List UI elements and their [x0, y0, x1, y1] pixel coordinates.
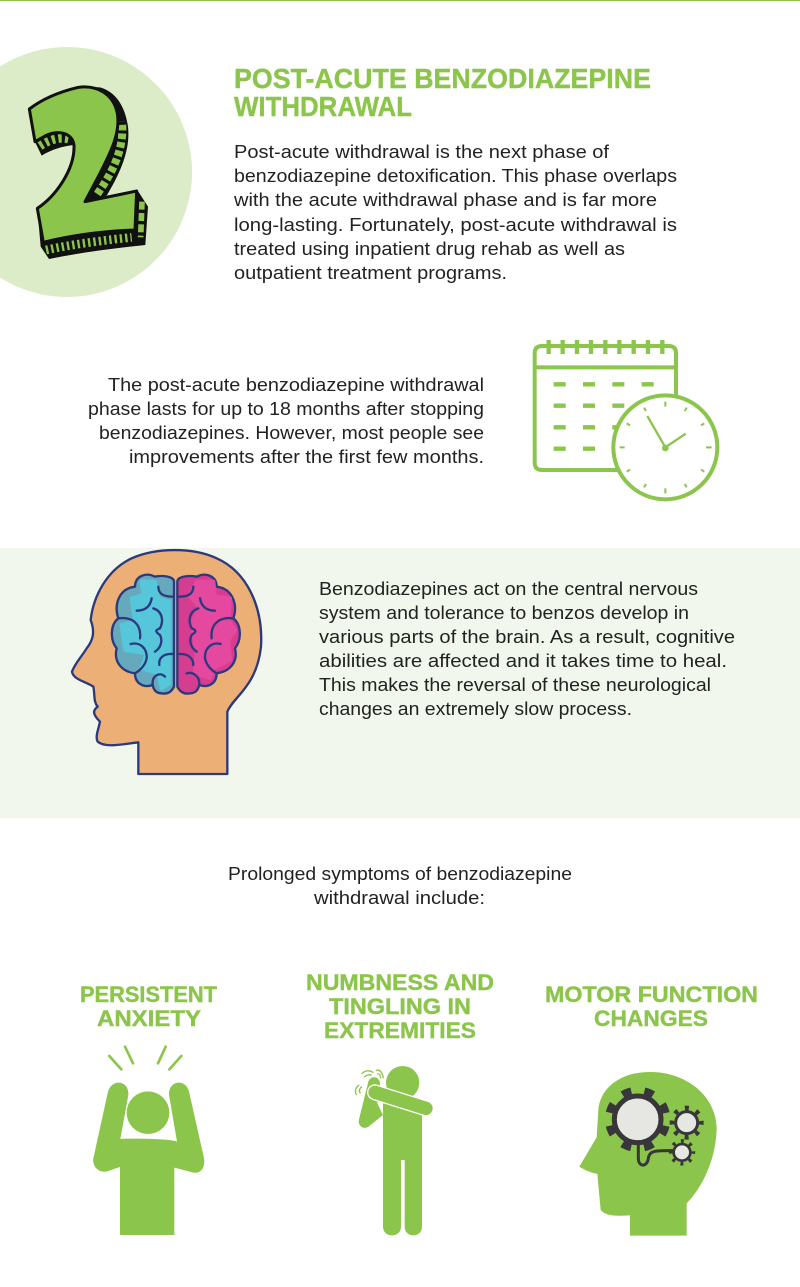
small gear [671, 1141, 693, 1164]
text block: intro: benzodiazepine detoxification. This phase overlaps [234, 166, 677, 186]
text block: brain explanation: Benzodiazepines act on the central nervous [319, 579, 698, 599]
panel: brain section [0, 548, 800, 818]
heading: motor function changes: MOTOR FUNCTION [545, 982, 758, 1007]
text block: symptoms intro: Prolonged symptoms of benzodiazepine [228, 864, 572, 884]
text block: intro [233, 142, 677, 283]
large gear [609, 1091, 666, 1148]
icon: calendar with clock [535, 340, 717, 499]
heading: numbness and tingling: EXTREMITIES [324, 1018, 476, 1043]
text block: brain explanation: various parts of the brain. As a result, cognitive [319, 627, 735, 647]
text block: duration: The post-acute benzodiazepine withdrawal [108, 375, 484, 395]
icon: head with brain [72, 550, 261, 774]
icon: anxious person [93, 1047, 204, 1235]
text block: brain explanation: changes an extremely slow process. [319, 699, 632, 719]
text block: brain explanation [319, 579, 735, 719]
icon: head with gears [579, 1072, 717, 1236]
heading: WITHDRAWAL [234, 91, 412, 122]
text block: intro: with the acute withdrawal phase and is far more [233, 190, 657, 210]
panel: number badge [0, 47, 192, 297]
heading: persistent anxiety: ANXIETY [97, 1006, 201, 1031]
heading: persistent anxiety [80, 982, 218, 1031]
text block: brain explanation: abilities are affected and it takes time to heal. [319, 651, 727, 671]
text block: brain explanation: system and tolerance to benzos develop in [319, 603, 689, 623]
text block: duration [88, 375, 484, 467]
heading: POST-ACUTE BENZODIAZEPINE [234, 63, 651, 94]
icon: person with tingling arm [355, 1066, 426, 1235]
heading: numbness and tingling [306, 970, 494, 1043]
heading: persistent anxiety: PERSISTENT [80, 982, 218, 1007]
text block: duration: improvements after the first few months. [129, 447, 484, 467]
text block: symptoms intro: withdrawal include: [313, 888, 485, 908]
text block: brain explanation: This makes the reversal of these neurological [319, 675, 711, 695]
icon: hand-drawn number 2 [29, 86, 148, 259]
text block: intro: treated using inpatient drug rehab as well as [234, 239, 625, 259]
text block: duration: phase lasts for up to 18 months after stopping [88, 399, 484, 419]
text block: symptoms intro [228, 864, 572, 908]
heading: numbness and tingling: NUMBNESS AND [306, 970, 494, 995]
heading: numbness and tingling: TINGLING IN [329, 994, 471, 1019]
heading [234, 63, 651, 122]
heading: motor function changes: CHANGES [594, 1006, 708, 1031]
text block: intro: Post-acute withdrawal is the next phase of [234, 142, 610, 162]
text block: intro: outpatient treatment programs. [234, 263, 507, 283]
text block: duration: benzodiazepines. However, most people see [99, 423, 484, 443]
text block: intro: long-lasting. Fortunately, post-acute withdrawal is [234, 215, 677, 235]
medium gear [672, 1108, 701, 1137]
heading: motor function changes [545, 982, 758, 1031]
